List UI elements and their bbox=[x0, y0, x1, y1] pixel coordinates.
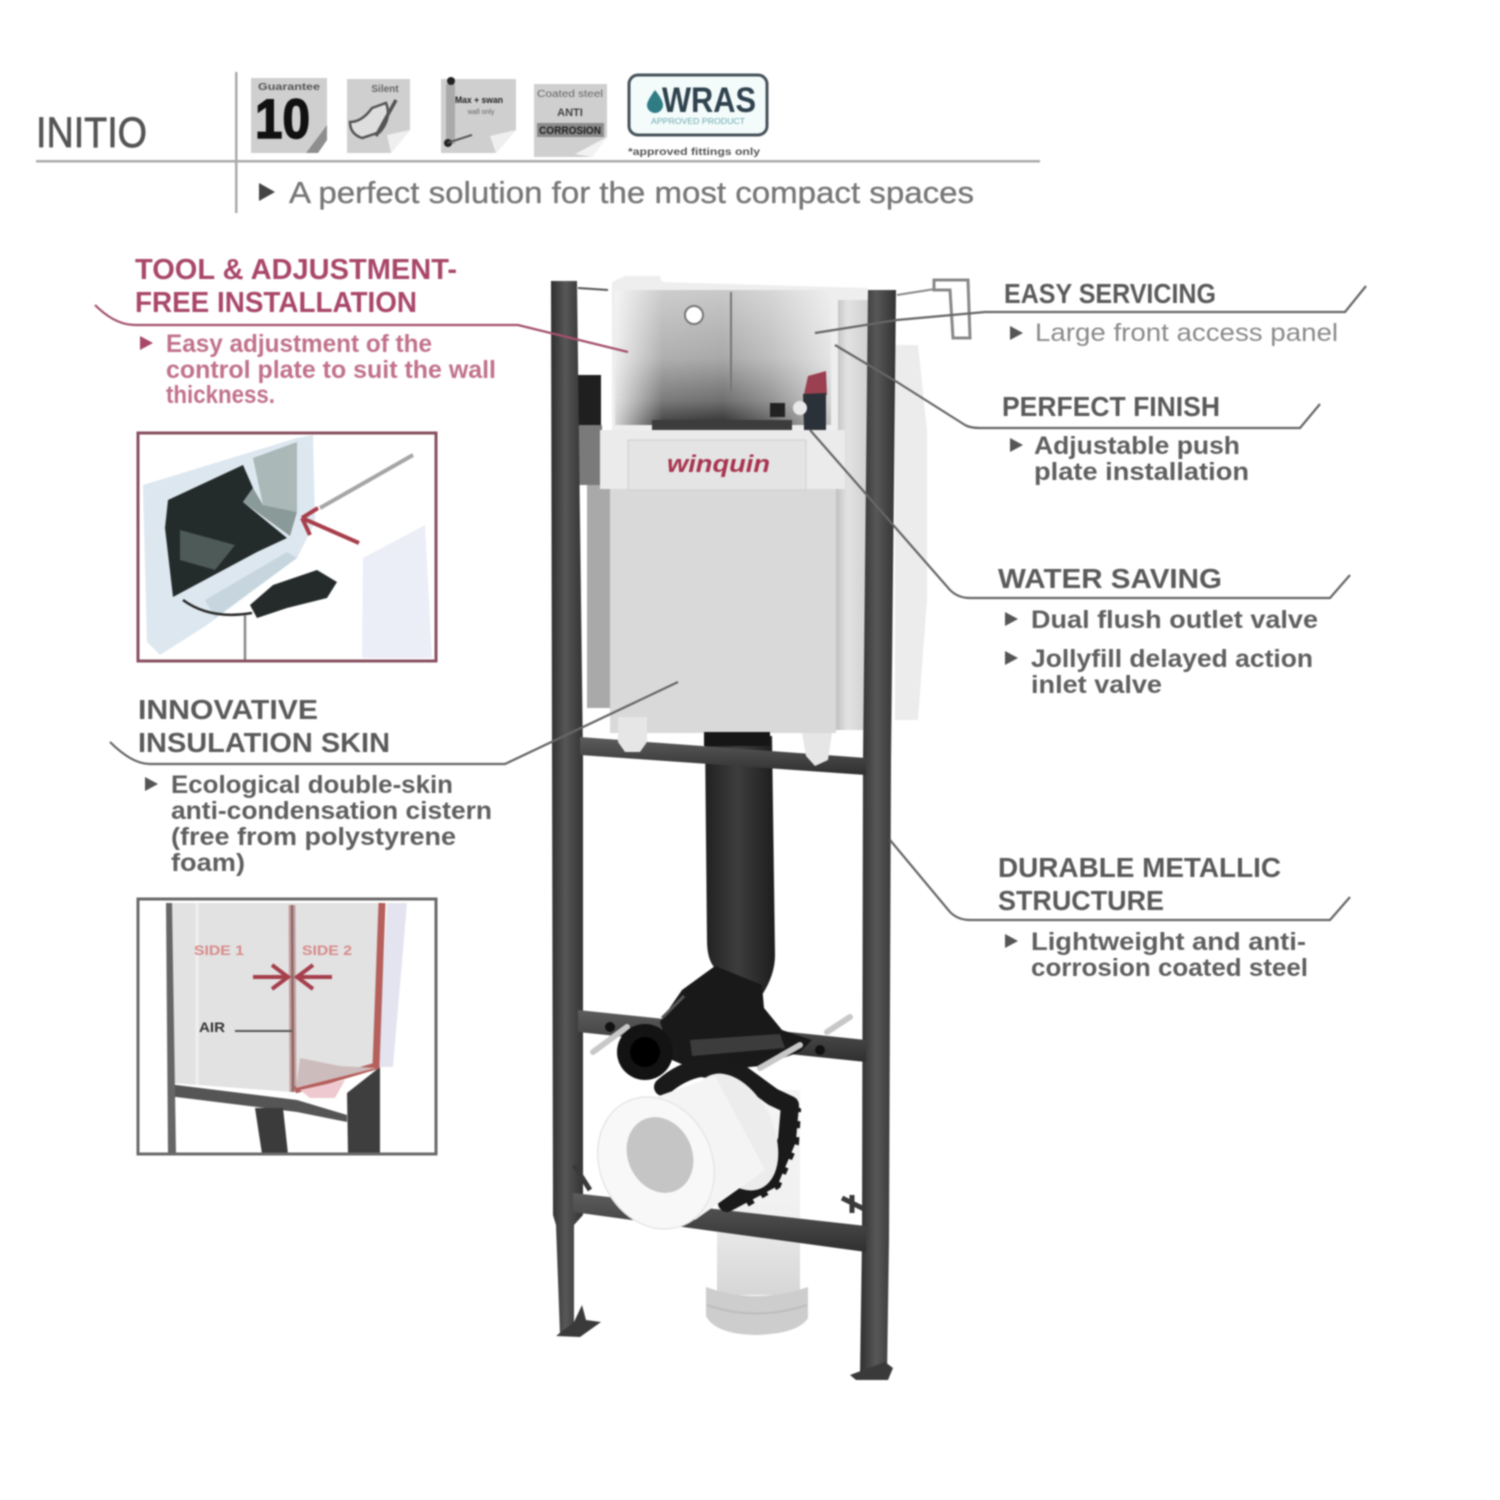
badge: 10 year guarantee bbox=[251, 78, 327, 153]
logo: winquin: winquin bbox=[667, 451, 770, 478]
description bbox=[145, 777, 158, 791]
footnote: approved fittings: *approved fittings only bbox=[628, 147, 761, 158]
drain pipe bbox=[700, 736, 775, 1010]
callout: water saving bbox=[810, 430, 1350, 699]
heading: EASY SERVICING bbox=[1004, 278, 1216, 309]
arrows pressing together bbox=[253, 965, 332, 989]
heading: DURABLE METALLIC bbox=[998, 852, 1281, 883]
badge: 10 year guarantee: Guarantee bbox=[258, 82, 321, 93]
leader line bbox=[110, 682, 678, 764]
heading: TOOL & ADJUSTMENT- bbox=[135, 254, 457, 286]
label: side 1: SIDE 1 bbox=[194, 942, 244, 958]
frame fixing brackets bbox=[574, 1165, 866, 1213]
leader line bbox=[835, 345, 1320, 428]
panel: double skin cross-section bbox=[138, 899, 436, 1154]
cistern body with insulation skin bbox=[600, 430, 845, 733]
callout: perfect finish bbox=[835, 345, 1320, 486]
title: INITIO: INITIO bbox=[36, 109, 147, 157]
callout: durable metallic structure: STRUCTURE bbox=[998, 885, 1164, 916]
callout: water saving: inlet valve bbox=[1031, 671, 1162, 699]
panel: push plate adjustment photo bbox=[138, 433, 436, 661]
flush valve detail bbox=[770, 371, 827, 430]
callout: water saving: Jollyfill delayed action bbox=[1031, 645, 1313, 673]
callout: tool and adjustment-free installation: control plate to suit the wall bbox=[166, 356, 496, 384]
red arrow bbox=[302, 508, 359, 543]
badge: wall thickness range bbox=[441, 77, 516, 153]
callout: durable metallic structure: Lightweight and anti- bbox=[1031, 928, 1306, 956]
label: side 2: SIDE 2 bbox=[302, 942, 352, 958]
callout: water saving: Dual flush outlet valve bbox=[1031, 606, 1318, 634]
callout: innovative insulation skin: foam) bbox=[171, 849, 245, 877]
label: air bbox=[199, 1019, 292, 1035]
pipe inlet and handles bbox=[593, 1017, 850, 1080]
leader line bbox=[890, 840, 1350, 920]
callout: perfect finish: Adjustable push bbox=[1034, 432, 1240, 460]
description bbox=[1005, 934, 1018, 948]
badge: coated steel anti corrosion bbox=[534, 84, 607, 157]
description bbox=[1010, 438, 1023, 452]
cistern rear and side panels bbox=[575, 290, 927, 730]
leader line bbox=[95, 305, 628, 352]
leader line bbox=[815, 286, 1366, 333]
callout: innovative insulation skin bbox=[110, 682, 678, 877]
callout: perfect finish: plate installation bbox=[1034, 458, 1249, 486]
badge: coated steel anti corrosion: Coated steel bbox=[537, 89, 603, 100]
cistern mounting tabs and valve collar bbox=[618, 717, 832, 766]
badge: coated steel anti corrosion: ANTI bbox=[557, 107, 583, 119]
callout: easy servicing bbox=[815, 278, 1366, 347]
badge: coated steel anti corrosion: CORROSION bbox=[539, 125, 601, 137]
badge: silent bbox=[347, 79, 410, 153]
pan connector lower pipe bbox=[706, 1090, 808, 1335]
product illustration: cistern on steel frame bbox=[551, 276, 970, 1380]
badge: WRAS approved: WRAS bbox=[662, 81, 756, 120]
heading: PERFECT FINISH bbox=[1002, 391, 1220, 422]
badge: wall thickness range: Max + swan bbox=[455, 95, 503, 105]
callout: easy servicing: Large front access panel bbox=[1035, 319, 1338, 347]
cistern upper shell with access opening bbox=[612, 276, 868, 440]
callout: tool and adjustment-free installation bbox=[95, 254, 628, 409]
label: air: AIR bbox=[199, 1019, 225, 1035]
callout: durable metallic structure bbox=[890, 840, 1350, 982]
description bbox=[1005, 612, 1018, 626]
heading: INNOVATIVE bbox=[138, 694, 318, 725]
heading: WATER SAVING bbox=[998, 563, 1222, 594]
black clip around pan connector bbox=[663, 1068, 797, 1207]
callout: tool and adjustment-free installation: thickness. bbox=[166, 381, 275, 409]
pipe elbow over crossbar bbox=[660, 966, 812, 1072]
callout: innovative insulation skin: (free from polystyrene bbox=[171, 823, 456, 851]
callout: tool and adjustment-free installation: FREE INSTALLATION bbox=[135, 287, 417, 319]
header: product name, badges and tagline bbox=[36, 72, 1040, 213]
white pan connector bbox=[577, 1060, 796, 1248]
leader line bbox=[810, 430, 1350, 598]
callout: tool and adjustment-free installation: Easy adjustment of the bbox=[166, 330, 432, 358]
description bbox=[1010, 326, 1023, 340]
badge: 10 year guarantee: 10 bbox=[255, 87, 310, 150]
badge: WRAS approved bbox=[629, 75, 767, 135]
badge: wall thickness range: wall only bbox=[467, 109, 495, 116]
tagline: A perfect solution for the most compact spaces bbox=[289, 175, 974, 210]
callout: innovative insulation skin: INSULATION SKIN bbox=[138, 727, 390, 758]
steel frame uprights and crossbars bbox=[551, 280, 970, 1380]
callout: innovative insulation skin: anti-condensation cistern bbox=[171, 797, 492, 825]
badge: WRAS approved: APPROVED PRODUCT bbox=[651, 117, 745, 126]
callout: innovative insulation skin: Ecological double-skin bbox=[171, 771, 453, 799]
badge: silent: Silent bbox=[371, 84, 399, 95]
callout: durable metallic structure: corrosion coated steel bbox=[1031, 954, 1308, 982]
description bbox=[140, 336, 153, 350]
